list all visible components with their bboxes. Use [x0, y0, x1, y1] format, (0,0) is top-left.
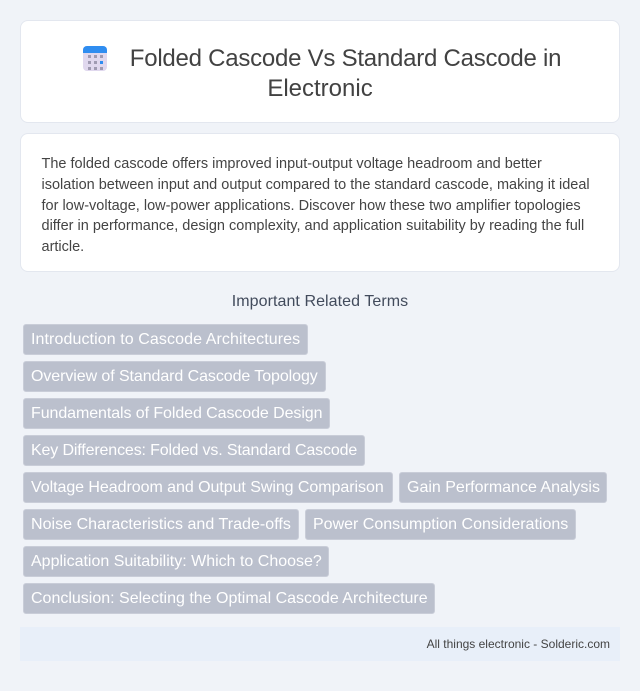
tag: [23, 435, 365, 466]
tag: Application Suitability: Which to Choose?: [31, 553, 322, 570]
intro paragraph: differ in performance, design complexity, and application suitability by reading the full: [42, 218, 584, 234]
tag: Conclusion: Selecting the Optimal Cascode Architecture: [31, 590, 428, 607]
intro paragraph: for low-voltage, low-power applications. Discover how these two amplifier topologies: [42, 198, 581, 214]
tag: [23, 398, 330, 429]
panel: intro text card: [20, 133, 620, 272]
tag: Overview of Standard Cascode Topology: [31, 368, 318, 385]
intro paragraph: isolation between input and output compared to the standard cascode, making it ideal: [42, 177, 590, 193]
intro paragraph: [42, 156, 590, 255]
tag: [23, 472, 393, 503]
tag: Power Consumption Considerations: [313, 516, 568, 533]
intro paragraph: The folded cascode offers improved input-output voltage headroom and better: [42, 156, 542, 172]
tag: [23, 509, 299, 540]
tag: [23, 546, 329, 577]
tag: Fundamentals of Folded Cascode Design: [31, 405, 322, 422]
footer bar: [20, 627, 620, 661]
intro paragraph: article.: [42, 239, 84, 255]
tag: Key Differences: Folded vs. Standard Cascode: [31, 442, 357, 459]
tag: [23, 324, 308, 355]
panel: related terms tags: [23, 324, 607, 614]
tag: Voltage Headroom and Output Swing Comparison: [31, 479, 384, 496]
tag: Introduction to Cascode Architectures: [31, 331, 300, 348]
tag: [23, 361, 326, 392]
tag: [399, 472, 607, 503]
heading: related terms: Important Related Terms: [232, 293, 408, 310]
title: [130, 45, 561, 102]
tag: [23, 583, 435, 614]
panel: title card: [20, 20, 620, 123]
tag: [305, 509, 576, 540]
title: Folded Cascode Vs Standard Cascode in: [130, 45, 561, 72]
footer credit: All things electronic - Solderic.com: [427, 637, 610, 651]
icon: calendar: [83, 46, 107, 71]
title: Electronic: [267, 75, 373, 102]
tag: Gain Performance Analysis: [407, 479, 600, 496]
tag: Noise Characteristics and Trade-offs: [31, 516, 291, 533]
